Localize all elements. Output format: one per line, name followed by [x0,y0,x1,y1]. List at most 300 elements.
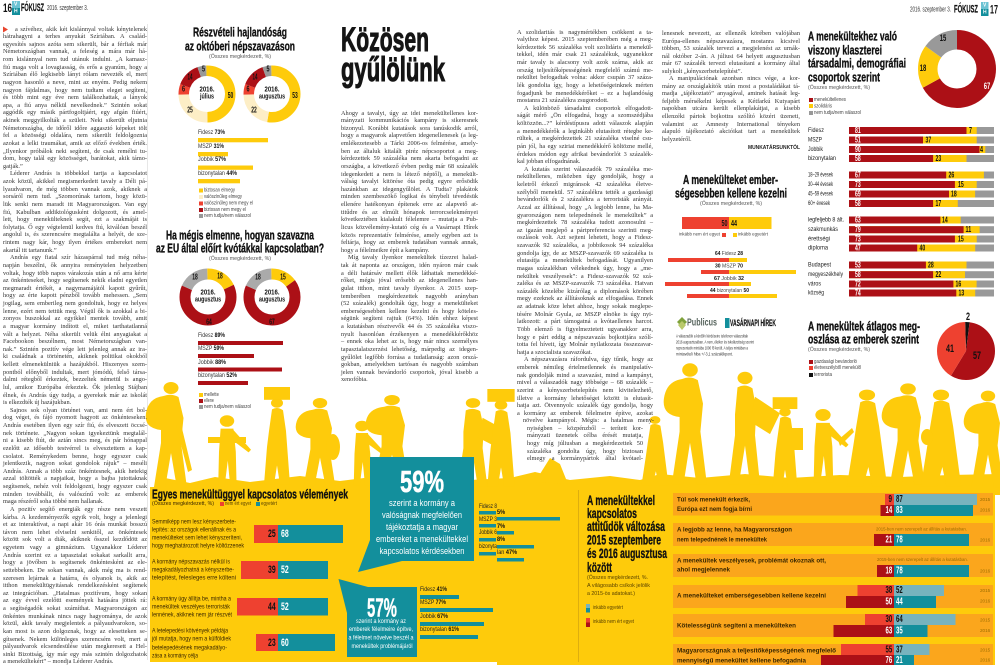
text block: article column 2: feltárja, hogy az emberek tudatában vannak annak, [341,239,478,246]
text block: article column 2: nyult hasonlóan érzékenyen a menedékkérőkhöz [341,331,478,338]
text block: article column 2: licus közvélemény-kutató cég és a Vasárnapi Hírek [341,224,478,231]
text block: article column 3, narrowing end: nyiségben – közpénzből – terített kor- [527,425,643,432]
row: treat more humanely: 2015 [980,588,991,593]
callout: 57 percent: 57% [367,592,397,622]
text block: article column 3: tésére Molnár Gyula, az MSZP elnöke is úgy nyi- [517,311,653,318]
stacked bars: education [808,216,994,252]
donut: second August: 15 [280,272,286,282]
donut: first August: 2016. [200,290,216,296]
callout: 57 percent [338,579,417,657]
text block: article column 1: fel a közösségi oldalára, nem sikerült feldolgoznia [3,132,147,139]
donut: 2016 August: augusztus [259,94,285,100]
donut: first August: 18 [217,272,223,280]
row: treat more humanely [673,585,993,608]
stacked bars: settlement: község [808,290,824,296]
text block: article column 1: lul, amikor Európába érkeztek. Ők jelenleg Stájban [3,384,147,391]
callout: 59 percent: kapcsolatos kérdésekben [380,546,465,556]
donut: 2016 July: július [199,94,214,100]
text block: article column 1: maga részéről soha többé nem hallanak. [3,498,104,505]
text block: article column 1: akinek meggyilkolták a szüleit. Neki sikerült eljutnia [3,117,147,124]
stacked bars: party: MSZP [808,136,822,144]
legend [809,97,861,116]
text block: article column 1: nagyon fájdalmas, hogy nem tudtam eleget segíteni, [3,86,147,94]
text block: article column 4: mány az országlakítók után most a postaládákat tá- [662,83,800,90]
row: refugees are dangerous: A menekültek veszélyesek, problémát okoznak ott, [677,558,826,564]
logo: Publicus [677,317,717,330]
text block: article column 3: a kormány az emberek félelmeire építve, azokat [517,410,653,417]
text block: article column 1: voltak, hogy több napos várakozás után a nő arra kérte [3,270,147,276]
row: accept according to capacity [673,644,993,665]
yellow background: left bottom panel [150,487,497,662]
text block: article column 1: lenne, ezért nem tettük meg. Végül ők is azokkal a bi- [3,308,147,315]
stacked bars: party: Fidesz [808,127,824,134]
stacked bars: education: 11 [966,225,972,234]
bars: 57 percent by party: MSZP 77% [420,600,447,606]
text block: article column 1: sorsáról nem tud. „Szomorúnak tartom, hogy közü- [3,193,147,200]
row: our duty to help: 30 [886,614,892,625]
text block: article column 4: napokban utcára került ellenplakátjai, a kisebb [662,105,800,112]
text block: article column 1: minden továbbállt, és valószínű volt: az emberek [3,491,147,498]
header: right page [910,2,998,16]
header: right page: 2016. szeptember 3. [910,6,951,14]
text block: article column 1: nek története. „Nagyon sokan igyekeztünk megtalál- [3,430,147,437]
heading: participation [185,24,295,54]
text block: article column 1: angolul is, és szerencsére megtalálta a helyét, de sze- [3,231,147,238]
bars: party: Fidesz 89% [198,333,226,339]
text block: article column 1: András szerint ez a tapasztalat sokakat sarkallt arra, [3,552,147,559]
heading: csoportok szerint [808,70,880,84]
stacked bars: education: érettségi [808,236,830,242]
row: refugees are dangerous: 18 [886,566,892,576]
stacked bars: party: 81 [855,126,861,135]
donut: 2016 August [246,64,298,117]
text block: article column 3: rültek, a megkérdezettek 21 százaléka viselné csu- [517,135,653,142]
row 4: zása a kormány célja [152,652,198,660]
row 2: 52 [281,564,289,576]
donut: second August [249,272,295,326]
stacked bars: age: 67 [855,170,861,180]
note and legend: attitude change: inkább nem ért egyet [593,619,635,625]
panel: attitude change heading: A menekültekkel [587,492,655,508]
stacked bars: settlement: 74 [855,288,861,298]
text block: article column 3, narrowing end: mányzati üzenetek célba érését mutatja, [527,432,643,439]
legend: életveszélyből menekülő [814,365,861,371]
row 2 [152,558,328,582]
note and legend: attitude change: inkább egyetért [593,605,624,611]
bars: 57 percent by party: Jobbik 67% [420,614,449,620]
total bar: 50 [722,218,728,228]
donut: 2016 August: 22 [251,106,257,114]
text block: article column 3: tekkel, idén már csak 21 százalékuk, ugyanekkor [517,51,653,58]
row: accept according to capacity: mennyiségű menekültet kellene befogadnia [677,658,806,664]
row 3 [152,596,328,618]
text block: article column 1: azokat a lelki traumákat, amik az előző években érték. [3,140,147,147]
text block: article column 1: Sajnos sok olyan történet van, ami nem ért bol- [10,407,147,414]
row: best if they do not settle: 78 [896,534,903,546]
heading: participation: az októberi népszavazáson [185,38,295,54]
bars: party: bizonytalan 52% [198,373,238,379]
row: best if they do not settle: 2015-ben nem szerepelt az állítás a kutatásban. [876,526,967,532]
callout: 59 percent [358,457,474,572]
pie [946,311,981,366]
text block: article column 3: A kutatás szerint válaszadók 79 százaléka me- [524,166,653,173]
text block: article column 3: elutasítja a menekültek befogadását. Ugyanilyen [517,257,653,264]
bars: party: Jobbik 88% [198,360,227,366]
stacked bars: education: 47 [855,244,861,252]
party bars: 64 Fidesz 28 [715,251,743,257]
text block: article column 1: jogilag, sem emberileg nem gondoltuk, hogy ez helyes [3,300,147,307]
callout: 57 percent: a félelmet növelve beszél a [348,636,414,642]
stacked bars: age: 18 [951,190,957,198]
text block: article column 1: ki családnak a történetén, akiknek politikai okokból [3,353,147,360]
text block: article column 2: közös reprezentatív felmérése, amely egyben azt is [341,232,478,238]
donut: overall: 67 [984,81,990,91]
legend [809,359,861,378]
row 1: hogy meghatározott helyre költözzenek [152,542,245,550]
text block: article column 3: százalék közelébe kizárólag a diplomások körében [517,288,653,295]
text block: article column 1: megmaradt értékét, a nagymamájától kapott gyűrűt, [3,285,147,292]
legend [199,392,251,410]
subtitle and legend: nem ért egyet [225,501,252,507]
row: too many refugees: Túl sok menekült érkezik, [677,496,750,504]
stacked bars: education: 79 [855,225,861,234]
text block: article column 1: dog véget, és fájó nyomott hagyott az önkénteseken. [3,414,147,421]
bars: 59 percent by party (split across the fold): Fidesz 8 [479,504,498,510]
row: our duty to help: 2016 [980,628,991,633]
row 1: lepítés: az országok ellenállnak és a [152,526,236,534]
chart: participation [182,24,298,219]
subtitle: (Összes megkérdezett, %) [700,200,762,207]
text block: article column 1: lett, hogy menekülteknek segít, ezt a szakmáját is [3,216,147,223]
text block: article column 3, narrowing end [527,425,643,462]
heading: ségesebben kellene kezelni [675,186,787,200]
stacked bars: education: 40 [920,244,926,252]
text block: article column 2: országba, a következő évben pedig már 68 százalék [341,163,478,170]
legend: gazdasági bevándorló [814,359,857,365]
bars: 59 percent by party (split across the fold) [479,504,560,562]
stacked bars: party: 58 [855,154,861,163]
row: too many refugees: Európa ezt nem fogja bírni [677,506,752,513]
stacked bars: age: 17 [936,199,942,208]
text block: article column 1: apa, a fiú anya nélkül nevelkednek.” Szintén sokat [3,102,147,109]
stacked bars: age: 60+ évesek [808,200,831,207]
stacked bars: settlement: 58 [855,270,861,279]
party bars [665,251,796,298]
text block: article column 2: minden szembeszökő logikai és ténybeli tévedésük [341,193,478,200]
donut: 2016 August: 53 [292,91,298,100]
text block: article column 1: távon nem lehet elviselni senkitől, az önkéntesek [3,529,147,536]
text block: article column 1: azok közül, akikkel megismerkedett tavaly a Déli pá- [3,178,147,185]
row 1: menekülteket sem lehet kényszeríteni, [152,534,242,542]
text block: article column 3: latkozott: a párt támogatná a kvótaellenes harcot. [517,318,653,325]
row 3: A kormány úgy állítja be, mintha a [152,596,231,602]
row: treat more humanely: 38 [886,585,892,596]
panel: attitude change heading: kapcsolatos [587,505,637,521]
heading [808,318,920,346]
text block: article column 1: kan most is azon dolgoznak, hogy az elesetteken se- [3,628,147,635]
pie: 41 [946,343,954,355]
header: right page: V [983,2,987,8]
text block: article column 3: totta fel híveit, így Molnár nyilatkozata összezavar- [517,341,653,348]
yellow background: right bottom panel [497,487,995,665]
stacked bars: settlement [808,260,994,298]
row: refugees are dangerous: 78 [896,566,903,576]
bars: party [198,333,283,385]
stacked bars: education: 15 [958,234,964,244]
text block: article column 4: alapuló tájékoztató akcióikat tart a menekültek [662,128,800,135]
stacked bars: settlement: 28 [928,260,934,270]
note and legend: attitude change: A világosabb csíkok jelölik [587,583,651,589]
donut: 2016 August: 2016. [264,86,280,94]
subtitle: (Összes megkérdezett, %) [808,84,870,91]
text block: article column 1: dom, hogy talál egy közösséget, barátokat, akik támo- [3,155,147,162]
row 4: betelepedésének megakadályo- [152,644,227,652]
party bars: 30 MSZP 70 [715,264,743,270]
text block: article column 1: fiú, Kabulban addiktológusként dolgozott, és amel- [3,208,147,216]
text block: article column 4: nál október 2-án. A júliusi 64 helyett augusztusban [662,53,800,60]
text block: article column 1: Szíriában élő legkisebb lányt rólam nevezték el, mert [3,71,147,78]
bars: 57 percent by party: bizonytalan 61% [420,627,460,633]
text block: article column 1: önkéntes munkának nincs nagy hagyománya, de azok [3,613,147,620]
row: too many refugees: 87 [896,494,903,505]
text block: article column 1: közül, akik tavaly megjelentek a pályaudvarokon, so- [3,620,147,627]
panel: attitude change heading: 2015 szeptembere [587,532,661,548]
stacked bars: age: 69 [855,190,861,198]
stacked bars: settlement: 13 [958,288,965,298]
text block: article column 1: azzal töltötték a napjaikat, hogy a bajba jutottaknak [3,475,147,482]
text block: article column 3: gondolja így, de az MSZP-szavazók 69 százaléka is [517,250,653,257]
stacked bars: age: 58 [855,199,861,208]
subtitle: (Összes megkérdezett, %) [808,346,870,353]
text block: article column 1: az önkénteseket, hogy segítsenek nekik eladni egyetlen [3,277,147,284]
bars: 59 percent by party (split across the fold): Jobbik 6 [479,530,498,536]
donut: 2016 July: 2016. [200,86,215,94]
text block: article column 1: akartál itt tartanunk.” [3,247,57,254]
donut: 2016 July: 50 [228,91,234,100]
stacked bars: education: 73 [855,234,861,244]
donut: first August: 64 [206,318,212,326]
text block: article column 3: valyihoz képest. 2015 szeptemberében még a meg- [517,36,653,43]
stacked bars: age [808,170,994,208]
text block: article column 1: gatják.” [3,163,23,170]
text block: article column 1: az egy évvel ezelőtti események hatására jöttek rá: [3,597,147,604]
text block: article column 1: ezelőtt az idősebb testvérrel is elvesztettem a kap- [3,445,147,452]
text block: article column 3: kal jobban elfogadnának. [517,158,580,165]
legend: valószínűleg elmegy [204,194,242,200]
text block: article column 3: már tavaly is alacsony volt azok száma, akik az [517,59,653,66]
bars: party: MSZP 31% [198,144,225,150]
text block: article column 3: A különböző társadalmi csoportok elfogadott- [524,105,653,112]
subtitle: (Összes megkérdezett, %) [209,53,271,60]
legend: nem tudja/nem válaszol [814,110,861,116]
subtitle and legend: (Összes megkérdezett, %) [152,500,214,507]
stacked bars: party: 7 [969,126,972,135]
text block: article column 1: a segítségadók sokat számíthat. Magyarországon az [3,605,147,612]
text block: article column 4: sulykolt „kényszerbetelepítést”. [662,68,742,75]
logo: Publicus: Publicus [687,318,717,328]
text block: article column 1: a magyar kormány indított el, miket tarthatatlanná [3,323,147,330]
text block: article column 1: csolatot. Reménykedem benne, hogy egyszer csak [3,452,147,460]
text block: article column 1: „Ilyenkor próbálok neki segíteni, de csak remélni tu- [3,148,147,154]
stacked bars: education: legfeljebb 8 ált. [808,216,844,224]
donut: 2016 August: 5 [266,64,270,74]
row 4: 60 [281,637,289,649]
row: too many refugees: 2016 [980,508,991,512]
text block: article column 3: ságát mérő „Ön elfogadná, hogy a szomszédjába [517,112,653,119]
donut: second August: 18 [255,272,261,282]
pie: 57 [973,350,981,362]
text block: article column 2: válság tavalyi kitörése óta pedig egyre erősödik [341,178,478,185]
bars: 59 percent by party (split across the fold): bizonyta [479,544,498,550]
heading: társadalmi, demográfiai [808,56,906,70]
legend: biztosan elmegy [204,188,235,194]
total bar [682,217,772,229]
text block: article column 1: rintem nagy kár, hogy ilyen értékes embereket nem [3,239,147,246]
row: best if they do not settle [673,523,993,546]
callout: 59 percent: valóságnak megfelelően [382,510,462,520]
row: our duty to help: Kötelességünk segíteni a menekülteken [677,622,796,630]
text block: article column 1: hátrahagyni a terhes anyukát Szíriában. A család- [3,33,147,40]
text block: article column 3: ország teljesítőképességének megfelelő számú me- [517,67,653,74]
row: best if they do not settle: 21 [886,534,892,546]
note and legend: attitude change: a 2015-ös adatokat.) [587,591,635,597]
chart: humane treatment [665,172,796,298]
row: treat more humanely: 50 [886,596,892,608]
donut: 2016 August: 14 [252,72,258,82]
text block: article column 4: lenesnek nevezett, az ellenzék körében valójában [662,30,800,37]
text block: article column 1: Németországba, de időről időre aggasztó képeket tölt [3,125,147,132]
bars: party: Jobbik 57% [198,157,227,163]
donut: 2016 July: 25 [187,106,193,114]
text block: article column 1: itthon menekültügyitásnak rendelkezésként segítenek [3,582,147,589]
row 2: A kormány népszavazás nélkül is [152,558,230,566]
text block: article column 3: Azzal az állítással, hogy „A legjobb lenne, ha Ma- [517,204,653,211]
header: left page: FÓKUSZ [21,1,44,14]
text block: article column 1: vált a helyzet. Néha sikerült velük élni anyagiakat a [3,330,147,338]
bars: 59 percent by party (split across the fold): lan 47% [497,550,518,556]
stacked bars: settlement: város [808,280,821,288]
legend: nem tudja/nem válaszol [204,404,251,410]
text block: article column 2: bizonyul. Korábbi kutatások sora tanúskodik arról, [341,125,478,132]
text block: article column 2: idegenkedett a nem is létező néptől), a menekült- [341,170,478,178]
text block: article column 4: ellenzéki pártok bojkottra szólító közéri üzeneti, [662,113,800,120]
text block: article column 4: többen, 53 százalék tervezi a megjelenést az urnák- [662,45,800,52]
text block: article column 3: érdekes módon egy afrikai bevándorlót 3 százalék- [517,150,653,158]
donut: overall: 18 [920,63,926,73]
heading: participation: Részvételi hajlandóság [193,24,287,40]
row 2: 39 [268,564,276,576]
text block: article column 1: jelentkezik, nagyon sokat gondolok rájuk” – meséli [3,460,147,467]
text block: article column 2: mányzati kommunikációs kampány is sikeresnek [341,117,478,124]
row: treat more humanely: 2016 [980,598,991,604]
vertical divider [146,24,149,660]
text block: article column 1: lyaudvaron, de még többen vannak azok, akiknek a [3,186,147,193]
stacked bars: settlement: Budapest [808,262,831,268]
row: accept according to capacity: 2015 [980,648,991,652]
main title: gyűlölünk [341,51,446,89]
stacked bars: age: 45–59 évesek [808,190,834,198]
text block: article column 2: tapasztalatszerzési lehetőség, márpedig az idegen- [341,346,478,353]
text block: article column 3: szélyből menekül. 57 százalékra tették a gazdasági [517,189,653,196]
header: right page: FÓKUSZ [954,2,978,16]
donut: first August [185,272,231,326]
row 3: 44 [268,601,276,613]
callout: 59 percent: 59% [400,464,444,499]
stacked bars: age: 18–29 évesek [808,172,834,178]
text block: article column 1: ni a kisebb fiút, de aztán sincs meg, és pár hónappal [3,437,147,444]
party bars: 44 bizonytalan 50 [710,288,749,294]
text block: article column 3: szerint a kényszerbetelepítés nem kivitelezhető, [517,387,653,394]
text block: article column 3, narrowing line: növelve kampányol. Mégis: a hatalmas meny- [523,417,654,424]
text block: article column 1: aggódik egy másik pártfogoltjáért, egy afgán fiúért, [3,109,147,116]
text block: article column 2: rőket, mégis jóval erősebb az idegenellenes han- [341,277,478,284]
text block: article column 3: nak gondolják mind a szavazást, mind a kampányt, [517,372,653,379]
note and legend: attitude change: (Összes megkérdezett, %. [587,574,648,581]
main title: Közösen [341,21,429,59]
text block: article column 3: mostanra 21 százalékra zsugorodott. [517,97,609,104]
logo: Vasárnapi Hírek: VASÁRNAPI HÍREK [730,318,776,328]
text block: article column 4: helyzetéről. [662,136,692,143]
heading [675,172,787,200]
row: our duty to help [673,614,993,637]
text block: article column 1: is elkezdték új hazájukban. [3,399,71,406]
stacked bars: age: 73 [855,180,861,189]
text block: article column 1: gítsenek. Nekem különleges szerencsém volt, mert a [3,636,147,642]
text block: article column 2: hazánkban az idegengyűlölet. A Tudta? plakátok [341,186,478,193]
methodology note: reprezentatív mintába 1000 fő került. A teljes mintában a [676,346,748,350]
heading: EU quota: az EU által előírt kvótákkal kapcsolatban? [156,240,324,256]
text block: article column 3: Több elemző is figyelmeztetett ugyanakkor arra, [517,326,653,333]
row: refugees are dangerous: 2016 [980,568,991,574]
text block: article column 4: madja „tájékoztató” anyagával, aminek hatását leg- [662,90,800,97]
text block: article column 1: élnek, és András úgy tudja, a gyerekek már az iskolát [3,392,147,398]
text block: article column 3: oszlások volt. Azt sejteni lehetett, hogy a Fidesz- [517,234,653,241]
row 1: 68 [281,528,289,540]
callout: 59 percent: embereket a menekültekkel [376,534,468,544]
text block: article column 2: hogy a félelmeikre épít a kampány. [341,247,429,254]
text block: article column 2: xenofóbia. [341,376,368,383]
legend: menekültellenes [814,97,846,103]
note and legend: attitude change [586,574,651,627]
donut: overall [920,33,990,98]
bars: party [198,130,268,183]
row 3: 52 [281,601,289,613]
text block: article column 2: Ahogy a tavalyi, úgy az idei menekültellenes kor- [341,110,478,116]
text block: article column 3: A népszavazásra ráfordulva, úgy tűnik, hogy az [524,356,653,363]
header: left page [3,1,88,15]
text block: article column 1: hogy az érte kapott pénzből tovább mehessen. „Sem [3,292,147,299]
text block: article column 1: András egy fiatal szír házaspárral tud még néha- [10,254,147,261]
text block: article column 1: segítsenek, nehéz volt feldolgozni, hogy egyszer csak [3,483,147,490]
text block: article column 2: jelen vannak bevándorló csoportok, jóval kisebb a [341,369,478,376]
text block: article column 3: megy ezeknek az állításoknak az elfogadása. Ennek [517,295,653,302]
text block: article column 1: settebbeken. De sokan vannak, akik még ma is rend- [3,567,147,574]
text block: article column 2: ellenére hatékonyan építenek erre az alapvető at- [341,201,478,208]
row 4: A letelepedési kötvények példája [152,628,228,634]
bars: 59 percent by party (split across the fold): 8% [497,537,506,543]
text block: article column 1: dalmi rétegből érkeztek, bezzeltek németül is ango- [3,376,147,383]
text block: article column 3, narrowing end: elmegy a kormánypártok által kvótael- [527,455,643,462]
text block: article column 4: feljebb mérsékelni képesek a Kétfarkú Kutyapárt [662,98,800,105]
row 4 [151,628,335,660]
text block: article column 1: napján beszélni, ők annyira reménytelen helyzetben [3,262,147,269]
header: left page: H [14,8,18,14]
text block: article column 1: zonyos buszokkal az egyikkel mentek tovább, amit [3,315,147,322]
stacked bars: party: bizonytalan [808,155,836,162]
heading: Egyes menekültüggyel kapcsolatos vélemények [152,486,349,502]
text block: article column 3: lék gondolta így, hogy a lehetőségeinknek mérten [517,82,653,89]
text block: article column 2: kérdezettek 59 százaléka nem akarta befogadni az [341,155,478,162]
